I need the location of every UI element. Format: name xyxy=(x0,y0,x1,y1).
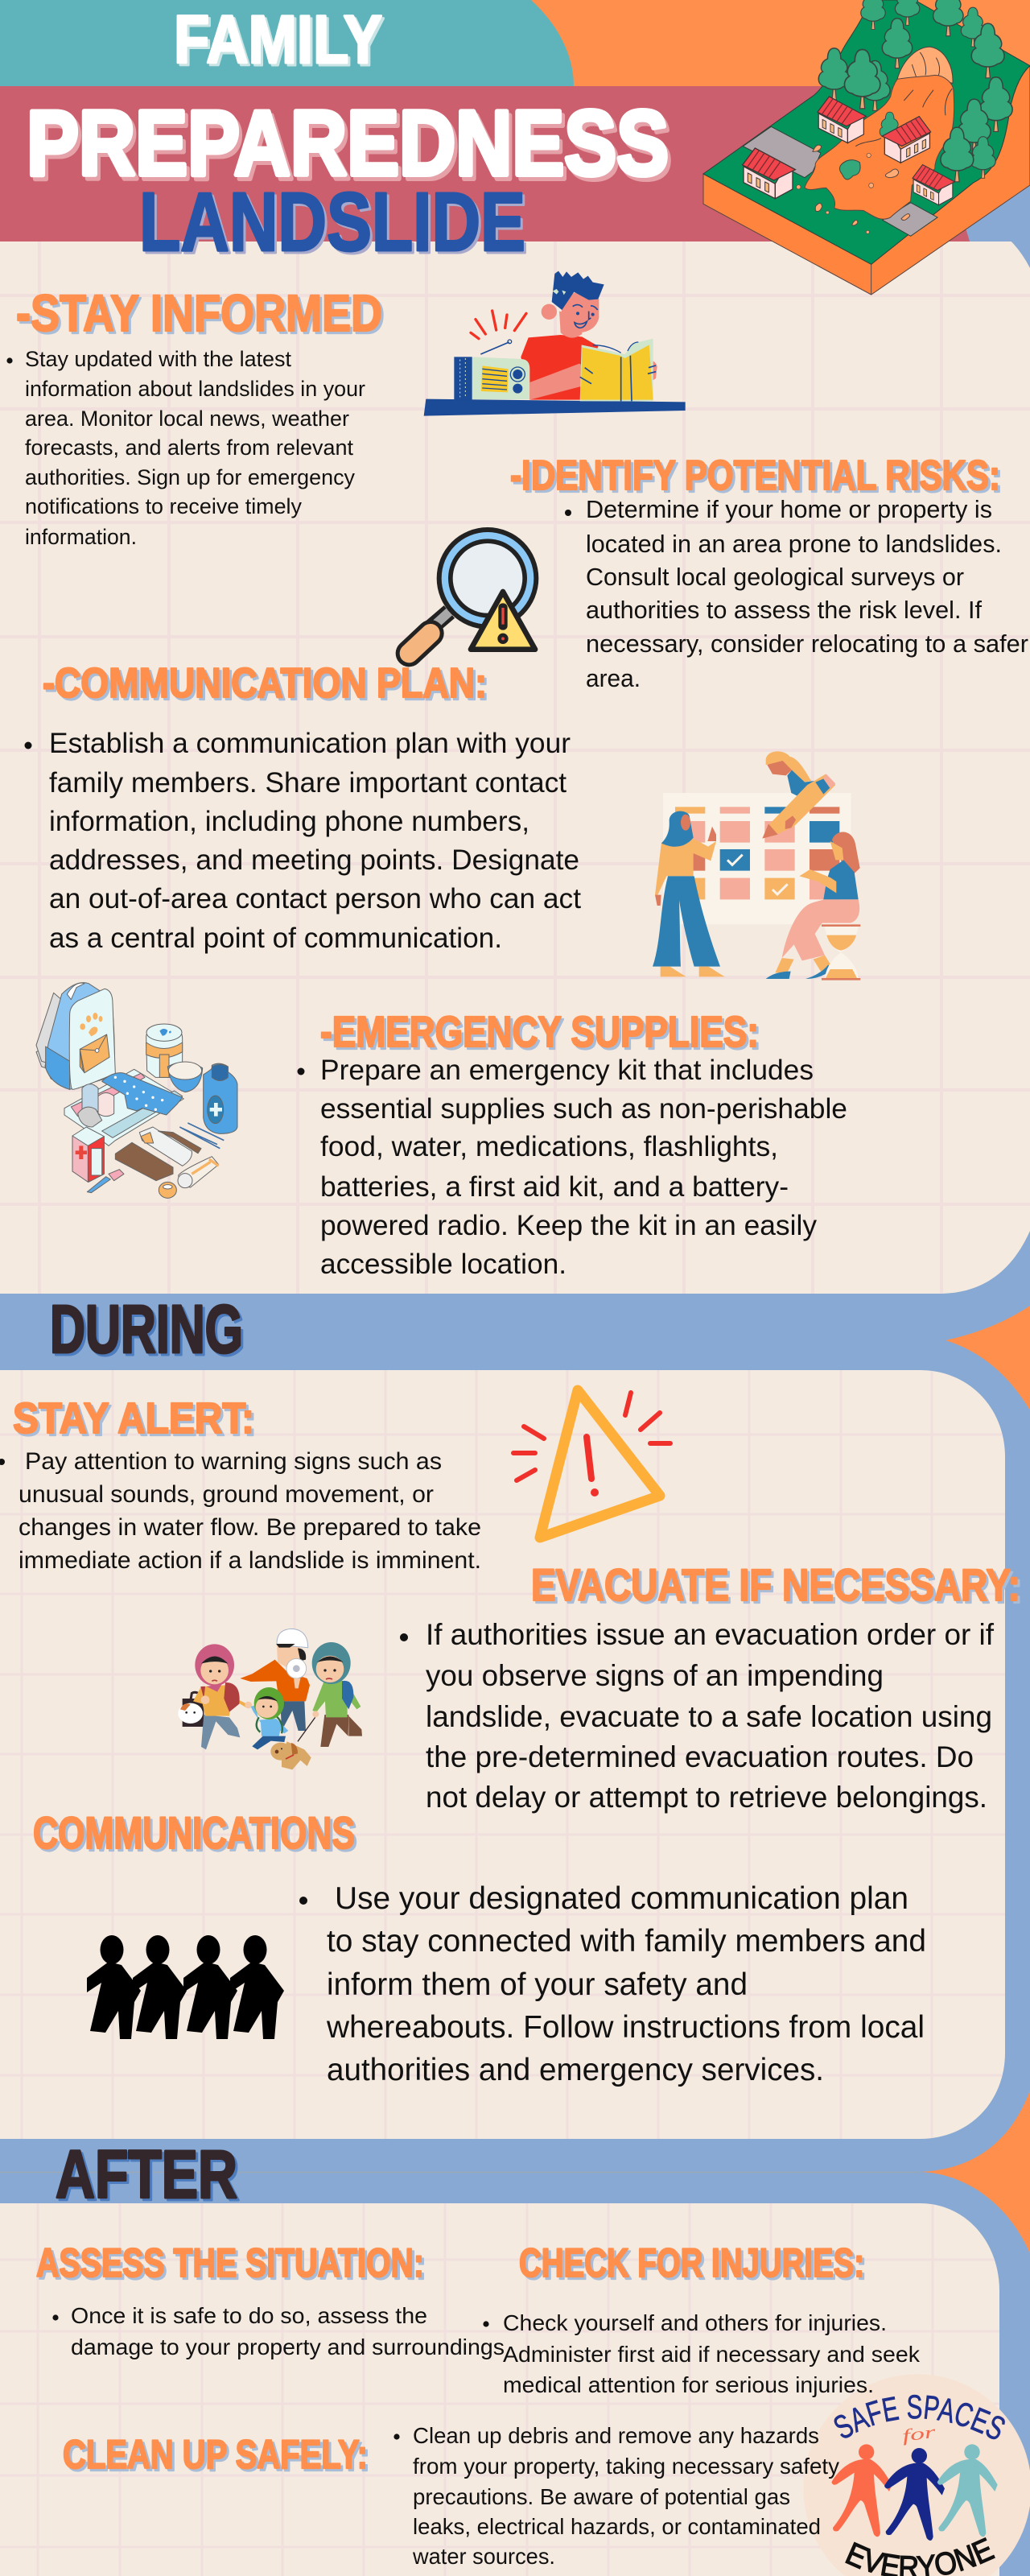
heading: emergency supplies: -EMERGENCY SUPPLIES: xyxy=(320,1008,759,1056)
heading: stay informed: -STAY INFORMED xyxy=(16,284,382,342)
heading: communications: COMMUNICATIONS xyxy=(33,1807,355,1858)
text: emergency supplies: accessible location. xyxy=(320,1249,566,1280)
text: check for injuries xyxy=(483,2310,921,2397)
text: check for injuries: Check yourself and others for injuries. xyxy=(503,2310,887,2335)
text: stay alert: changes in water flow. Be prepared to take xyxy=(19,1514,481,1541)
text: stay alert: immediate action if a landslide is imminent. xyxy=(19,1547,481,1574)
text: emergency supplies: batteries, a first aid kit, and a battery- xyxy=(320,1171,789,1203)
text: clean up safely: leaks, electrical hazards, or contaminated xyxy=(413,2514,821,2539)
heading: stay alert: STAY ALERT: xyxy=(13,1394,254,1443)
text: emergency supplies xyxy=(298,1055,847,1280)
text: communications: inform them of your safety and xyxy=(327,1967,748,2002)
text: communications: whereabouts. Follow instructions from local xyxy=(326,2010,925,2045)
text: stay informed: authorities. Sign up for emergency xyxy=(25,465,355,489)
text: communication plan: family members. Share important contact xyxy=(49,767,566,799)
text: communication plan: an out-of-area contact person who can act xyxy=(49,883,581,914)
section heading: after: AFTER xyxy=(56,2136,237,2212)
icon: evacuating family xyxy=(178,1629,362,1769)
text: clean up safely: from your property, taking necessary safety xyxy=(413,2454,839,2479)
blue backdrop xyxy=(0,1208,1030,2576)
text: communication plan: addresses, and meeting points. Designate xyxy=(49,844,579,876)
text: check for injuries: medical attention for serious injuries. xyxy=(503,2372,874,2397)
panel: before xyxy=(0,242,1030,1296)
heading: stay alert: STAY ALERT: xyxy=(15,1397,257,1445)
heading: clean up safely: CLEAN UP SAFELY: xyxy=(63,2432,368,2477)
header pink band xyxy=(0,86,1030,242)
text: stay alert: Pay attention to warning signs such as xyxy=(25,1448,442,1475)
text: stay informed: information. xyxy=(25,525,137,549)
text: communication plan: as a central point of communication. xyxy=(49,923,502,954)
blue corner arc xyxy=(958,169,1030,274)
text: communications: to stay connected with family members and xyxy=(327,1924,926,1959)
text: clean up safely xyxy=(393,2423,839,2569)
icon: family calendar planning xyxy=(653,751,860,980)
text: identify potential risks: located in an area prone to landslides. xyxy=(586,530,1002,558)
heading: communication plan: -COMMUNICATION PLAN: xyxy=(45,663,489,709)
text: check for injuries: Administer first aid if necessary and seek xyxy=(503,2342,921,2367)
icon: boy with radio and book xyxy=(424,271,686,416)
text: identify potential risks: area. xyxy=(586,665,641,692)
heading: clean up safely: CLEAN UP SAFELY: xyxy=(65,2434,370,2479)
logo: safe spaces for everyone: SAFE SPACES xyxy=(834,2394,1005,2439)
text: identify potential risks xyxy=(565,496,1028,692)
heading: assess the situation: ASSESS THE SITUATION: xyxy=(36,2240,424,2285)
teal header shape xyxy=(0,0,574,86)
orange star: during xyxy=(946,1306,1030,1410)
text: evacuate: landslide, evacuate to a safe location using xyxy=(426,1700,992,1733)
text: communications: Use your designated communication plan xyxy=(335,1881,908,1916)
text: emergency supplies: Prepare an emergency kit that includes xyxy=(320,1055,814,1086)
text: stay alert xyxy=(0,1448,481,1574)
text: assess the situation: damage to your property and surroundings xyxy=(71,2334,505,2359)
text: assess the situation xyxy=(52,2303,505,2359)
text: clean up safely: Clean up debris and remove any hazards xyxy=(413,2423,819,2448)
icon: emergency kit xyxy=(36,983,237,1198)
text: emergency supplies: food, water, medications, flashlights, xyxy=(320,1131,778,1162)
text: evacuate: you observe signs of an impending xyxy=(426,1659,884,1692)
heading: assess the situation: ASSESS THE SITUATION: xyxy=(39,2243,426,2288)
orange star: after xyxy=(920,2091,1030,2254)
text: communication plan xyxy=(24,728,581,954)
text: stay informed: area. Monitor local news, weather xyxy=(25,407,349,431)
logo: safe spaces for everyone xyxy=(803,2375,1030,2576)
text: clean up safely: water sources. xyxy=(412,2544,555,2569)
title: preparedness: PREPAREDNESS xyxy=(27,93,669,195)
section heading: during: DURING xyxy=(50,1291,243,1367)
icon: magnifier with warning xyxy=(409,527,538,654)
heading: check for injuries: CHECK FOR INJURIES: xyxy=(521,2243,867,2288)
text: stay informed: forecasts, and alerts from relevant xyxy=(25,436,353,460)
text: stay informed: information about landslides in your xyxy=(25,377,365,401)
text: stay informed xyxy=(6,347,365,549)
heading: stay informed: -STAY INFORMED xyxy=(19,287,385,345)
text: stay informed: Stay updated with the latest xyxy=(25,347,291,371)
text: clean up safely: precautions. Be aware of potential gas xyxy=(413,2484,790,2509)
header orange background xyxy=(0,0,1030,86)
title: landslide: LANDSLIDE xyxy=(142,178,528,270)
logo: safe spaces for everyone: for xyxy=(901,2421,937,2446)
text: assess the situation: Once it is safe to do so, assess the xyxy=(71,2303,427,2328)
heading: communication plan: -COMMUNICATION PLAN: xyxy=(43,660,487,707)
text: identify potential risks: authorities to assess the risk level. If xyxy=(586,597,983,624)
text: communication plan: Establish a communication plan with your xyxy=(49,728,571,759)
text: evacuate: not delay or attempt to retrieve belongings. xyxy=(426,1781,987,1814)
text: emergency supplies: essential supplies such as non-perishable xyxy=(320,1093,847,1125)
heading: check for injuries: CHECK FOR INJURIES: xyxy=(519,2240,864,2285)
text: communications: authorities and emergency services. xyxy=(327,2053,824,2087)
text: communications xyxy=(299,1881,926,2087)
text: identify potential risks: Consult local geological surveys or xyxy=(586,564,964,591)
section heading: during: DURING xyxy=(52,1294,245,1369)
title: family: FAMILY xyxy=(174,2,382,77)
section heading: after: AFTER xyxy=(58,2139,240,2215)
panel: after xyxy=(0,2203,1030,2576)
icon: warning triangle xyxy=(513,1390,670,1538)
title: landslide: LANDSLIDE xyxy=(139,175,525,268)
text: evacuate xyxy=(400,1618,995,1814)
heading: emergency supplies: -EMERGENCY SUPPLIES: xyxy=(323,1010,761,1059)
text: evacuate: the pre-determined evacuation routes. Do xyxy=(426,1740,974,1773)
text: identify potential risks: Determine if your home or property is xyxy=(586,496,992,523)
icon: paper chain people xyxy=(87,1935,284,2039)
text: emergency supplies: powered radio. Keep the kit in an easily xyxy=(320,1210,817,1241)
title: preparedness: PREPAREDNESS xyxy=(30,97,672,199)
panel: during xyxy=(0,1370,1030,2143)
text: stay informed: notifications to receive timely xyxy=(25,494,302,518)
heading: communications: COMMUNICATIONS xyxy=(35,1810,357,1860)
text: evacuate: If authorities issue an evacuation order or if xyxy=(426,1618,995,1651)
title: family: FAMILY xyxy=(176,4,385,80)
text: stay alert: unusual sounds, ground movement, or xyxy=(19,1481,434,1508)
text: identify potential risks: necessary, consider relocating to a safer xyxy=(586,630,1028,658)
text: communication plan: information, including phone numbers, xyxy=(49,806,529,837)
icon: landslide terrain xyxy=(703,0,1030,295)
